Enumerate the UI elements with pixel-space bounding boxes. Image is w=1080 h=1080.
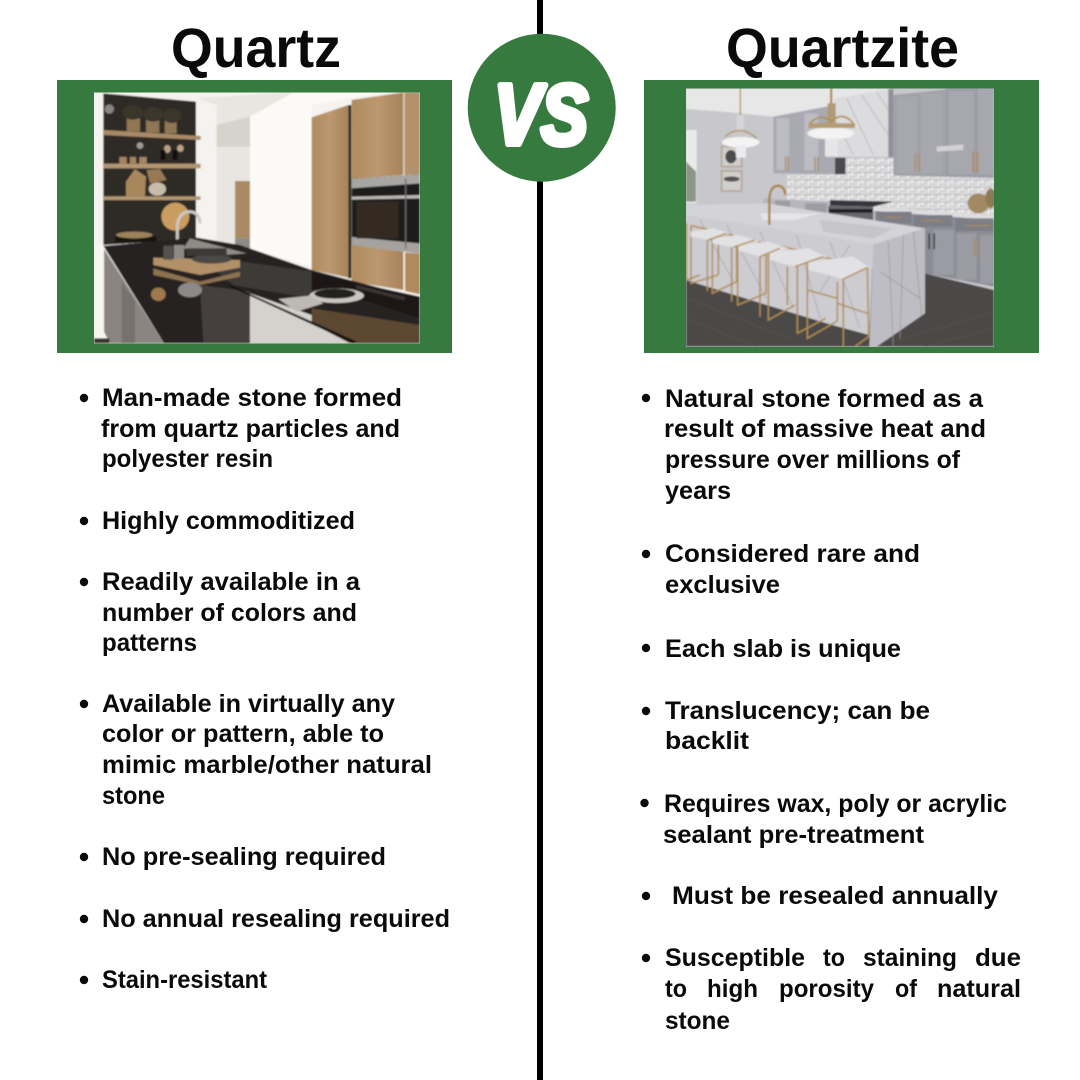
bullet: rare and exclusive: exclusive <box>665 571 780 599</box>
bullet: susceptible to staining: to <box>665 975 687 1003</box>
title: Quartz: Quartz <box>171 16 341 79</box>
bullet: susceptible to staining: Susceptible <box>665 944 805 972</box>
bullet: requires sealant <box>640 790 1007 849</box>
bullet: translucency: backlit <box>665 727 750 755</box>
bullet: susceptible to staining: stone <box>665 1007 730 1035</box>
bullet: no pre-sealing: No pre-sealing required <box>102 843 386 871</box>
bullet: requires sealant: Requires wax, poly or acrylic <box>664 790 1007 818</box>
bullet: translucency: Translucency; can be <box>665 697 930 725</box>
bullet: natural stone: Natural stone formed as a <box>665 385 984 413</box>
bullet list: quartz <box>80 384 450 994</box>
bullet: susceptible to staining <box>642 944 1021 1035</box>
bullet: readily available <box>80 568 361 657</box>
bullet: natural stone: pressure over millions of <box>665 446 961 474</box>
bullet: man-made stone: from quartz particles and <box>101 415 400 443</box>
bullet: highly commoditized: Highly commoditized <box>102 507 355 535</box>
title: Quartzite: Quartzite <box>726 16 959 79</box>
VS badge: VS <box>494 68 588 163</box>
bullet: natural stone: result of massive heat and <box>664 415 986 443</box>
bullet: susceptible to staining: porosity <box>779 975 874 1003</box>
bullet: rare and exclusive: Considered rare and <box>665 540 920 568</box>
bullet: susceptible to staining: due <box>975 944 1021 972</box>
bullet: natural stone <box>642 385 986 505</box>
bullet: no annual resealing: No annual resealing required <box>102 905 450 933</box>
bullet: readily available: number of colors and <box>102 599 357 627</box>
panel: quartz image <box>57 80 452 353</box>
bullet: susceptible to staining: staining <box>863 944 957 972</box>
bullet: stain-resistant: Stain-resistant <box>102 966 268 994</box>
panel: quartzite image <box>644 80 1039 353</box>
bullet: readily available: Readily available in a <box>102 568 361 596</box>
bullet: man-made stone: Man-made stone formed <box>102 384 402 412</box>
photo: quartz kitchen <box>90 85 430 352</box>
bullet: rare and exclusive <box>642 540 920 599</box>
bullet: susceptible to staining: natural <box>937 975 1021 1003</box>
bullet: any color or pattern: stone <box>102 782 165 810</box>
bullet: any color or pattern: Available in virtually any <box>102 690 395 718</box>
bullet: natural stone: years <box>665 477 731 505</box>
bullet: any color or pattern: color or pattern, able to <box>102 720 384 748</box>
center divider line <box>537 0 543 1080</box>
bullet list: quartzite <box>640 385 1021 1035</box>
bullet: any color or pattern: mimic marble/other natural <box>102 751 432 779</box>
bullet: susceptible to staining: high <box>707 975 758 1003</box>
photo: quartzite kitchen <box>680 85 1000 352</box>
bullet: requires sealant: sealant pre-treatment <box>663 821 925 849</box>
bullet: resealed annually: Must be resealed annually <box>672 882 998 910</box>
bullet: man-made stone: polyester resin <box>102 445 273 473</box>
bullet: each slab unique: Each slab is unique <box>665 635 901 663</box>
bullet: any color or pattern <box>80 690 432 810</box>
bullet: translucency <box>642 697 930 755</box>
bullet: susceptible to staining: to <box>823 944 845 972</box>
bullet: susceptible to staining: of <box>895 975 918 1003</box>
bullet: man-made stone <box>80 384 402 473</box>
bullet: readily available: patterns <box>102 629 197 657</box>
VS badge <box>468 34 616 182</box>
